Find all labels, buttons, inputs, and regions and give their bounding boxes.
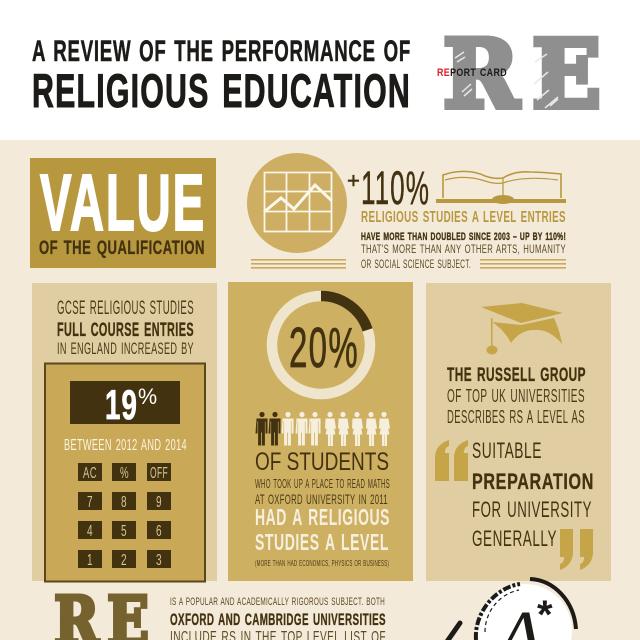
calculator caption: BETWEEN 2012 AND 2014 — [64, 437, 187, 454]
icon: graduation cap — [481, 303, 563, 354]
quote text: GENERALLY — [472, 526, 557, 551]
stat: +110% — [347, 161, 430, 214]
header band — [0, 0, 640, 140]
calculator keys: % — [120, 465, 129, 482]
quote text — [472, 438, 594, 551]
students text: AT OXFORD UNIVERSITY IN 2011 — [255, 491, 388, 507]
icon: A* stamp — [446, 579, 576, 640]
calculator keys: 5 — [121, 523, 127, 540]
calculator display: % — [138, 384, 158, 409]
text: A level entries — [361, 209, 566, 271]
calculator keys: 1 — [87, 552, 93, 569]
icon: line chart in circle — [247, 153, 347, 253]
calculator keys — [78, 463, 171, 569]
value heading box — [30, 158, 216, 268]
calculator keys: 2 — [121, 552, 127, 569]
GCSE text: IN ENGLAND INCREASED BY — [57, 339, 194, 358]
calculator keys: OFF — [150, 465, 168, 482]
students text: HAD A RELIGIOUS — [255, 504, 390, 530]
calculator keys: 7 — [87, 494, 93, 511]
decorative stat lines left — [251, 259, 346, 269]
stat: 20%: 20% — [289, 316, 359, 380]
quote text: PREPARATION — [472, 469, 594, 494]
GCSE text: FULL COURSE ENTRIES — [57, 320, 194, 341]
title: RELIGIOUS EDUCATION — [32, 64, 411, 117]
GCSE text: GCSE RELIGIOUS STUDIES — [57, 298, 194, 319]
GCSE text — [57, 298, 194, 358]
logo: RE report card: REPORT CARD — [437, 67, 507, 79]
students text — [255, 448, 390, 568]
calculator keys: 3 — [156, 552, 162, 569]
panel: 20% of students: WHO TOOK UP A PLACE TO READ MATHS — [255, 476, 390, 491]
icon: opening quote — [435, 440, 468, 481]
icon: A* stamp: * — [537, 593, 553, 637]
icon: open book — [436, 171, 566, 204]
calculator keys: AC — [83, 465, 97, 482]
logo: RE report card — [437, 20, 601, 130]
value heading box: OF THE QUALIFICATION — [39, 238, 205, 259]
quote text: SUITABLE — [472, 438, 542, 463]
people pictogram — [256, 412, 390, 446]
calculator body — [45, 364, 205, 582]
calculator keys: 9 — [156, 494, 162, 511]
title — [32, 35, 411, 117]
calculator keys: 8 — [121, 494, 127, 511]
donut chart 20% — [272, 296, 370, 394]
calculator display — [70, 381, 180, 428]
panel: Russell Group — [426, 283, 611, 581]
panel: 20% of students — [228, 282, 413, 581]
students text: (MORE THAN HAD ECONOMICS, PHYSICS OR BUSINESS) — [255, 559, 389, 568]
logo: RE small — [54, 582, 149, 640]
text: A level entries: OR SOCIAL SCIENCE SUBJECT. — [361, 257, 471, 271]
students text: STUDIES A LEVEL — [255, 529, 389, 555]
text: Oxford and Cambridge: OXFORD AND CAMBRIDGE UNIVERSITIES — [170, 610, 386, 629]
logo: RE report card: E — [532, 20, 601, 130]
students text: OF STUDENTS — [255, 448, 389, 476]
calculator keys: 6 — [156, 523, 162, 540]
decorative stat lines right — [480, 259, 566, 269]
icon: closing quote — [560, 529, 593, 570]
calculator display: 19 — [105, 381, 138, 428]
panel: GCSE entries — [32, 283, 217, 582]
title: A REVIEW OF THE PERFORMANCE OF — [32, 35, 411, 68]
value heading box: VALUE — [40, 158, 206, 247]
logo: RE report card: R — [443, 20, 520, 130]
calculator keys: 4 — [87, 523, 93, 540]
stat: +110%: + — [347, 168, 361, 193]
text: Oxford and Cambridge — [170, 596, 386, 640]
Russell Group text — [447, 365, 586, 427]
text: Oxford and Cambridge: IS A POPULAR AND ACADEMICALLY RIGOROUS SUBJECT. BOTH — [170, 596, 385, 608]
stat: +110%: 110% — [361, 161, 430, 214]
